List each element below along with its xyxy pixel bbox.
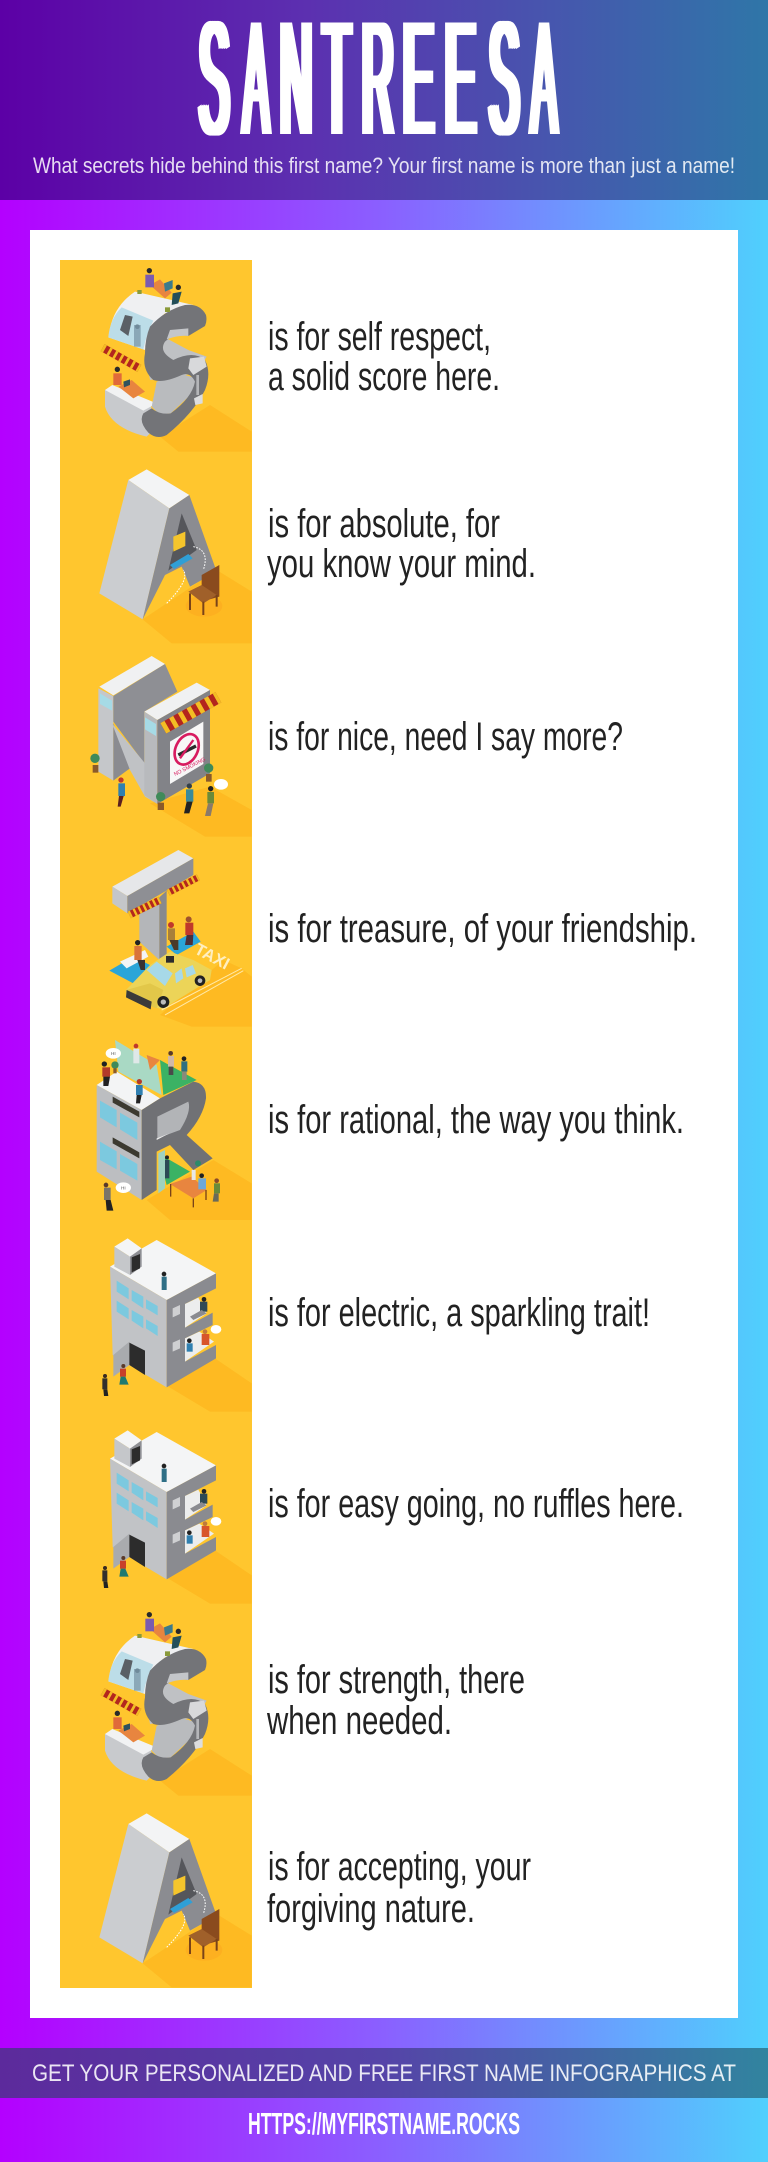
text: S line: is for self respect,	[268, 315, 491, 359]
title	[197, 0, 560, 169]
row: letter S	[103, 268, 500, 452]
text: S line	[268, 315, 500, 399]
text: A line: is for absolute, for	[268, 502, 500, 546]
icon: isometric letter A building repeat	[99, 1813, 252, 1987]
icon: isometric letter R building: HI	[121, 1185, 126, 1190]
header band	[0, 0, 768, 200]
yellow illustration column	[60, 260, 252, 1988]
icon: isometric letter N building: NO SMOKING	[173, 757, 207, 778]
text: A line: you know your mind.	[267, 542, 536, 586]
row: letter N	[90, 656, 623, 837]
text: N line: is for nice, need I say more?	[268, 715, 623, 759]
icon: isometric letter R building	[97, 1040, 252, 1220]
text: S line: a solid score here.	[268, 355, 500, 399]
row: letter S second	[103, 1612, 525, 1796]
footer url: HTTPS://MYFIRSTNAME.ROCKS	[248, 2106, 520, 2141]
row: letter E second	[102, 1430, 684, 1604]
row: letter A second	[99, 1813, 531, 1987]
row: letter R	[97, 1040, 684, 1220]
text: S second line: when needed.	[266, 1699, 452, 1743]
text: S second line: is for strength, there	[268, 1658, 525, 1702]
text: A second line: forgiving nature.	[267, 1887, 475, 1931]
text: A second line: is for accepting, your	[268, 1845, 531, 1889]
text: A line	[267, 502, 536, 586]
icon: isometric letter E building repeat	[102, 1430, 252, 1604]
icon: isometric letter R building: HI	[111, 1051, 116, 1056]
icon: isometric letter N building	[90, 656, 252, 837]
icon: isometric letter A building	[99, 469, 252, 643]
icon: isometric letter E building	[102, 1238, 252, 1412]
row: letter T	[109, 850, 697, 1027]
icon: isometric letter T with taxi: TAXI	[191, 939, 233, 973]
row: letter E	[102, 1238, 650, 1412]
icon: isometric letter T with taxi	[109, 850, 252, 1027]
row: letter A	[99, 469, 536, 643]
white content panel	[30, 230, 738, 2018]
footer band	[0, 2048, 768, 2098]
text: S second line	[266, 1658, 525, 1743]
text: A second line	[267, 1845, 531, 1931]
icon: isometric letter S building repeat	[103, 1612, 252, 1796]
icon: isometric letter S building	[103, 268, 252, 452]
